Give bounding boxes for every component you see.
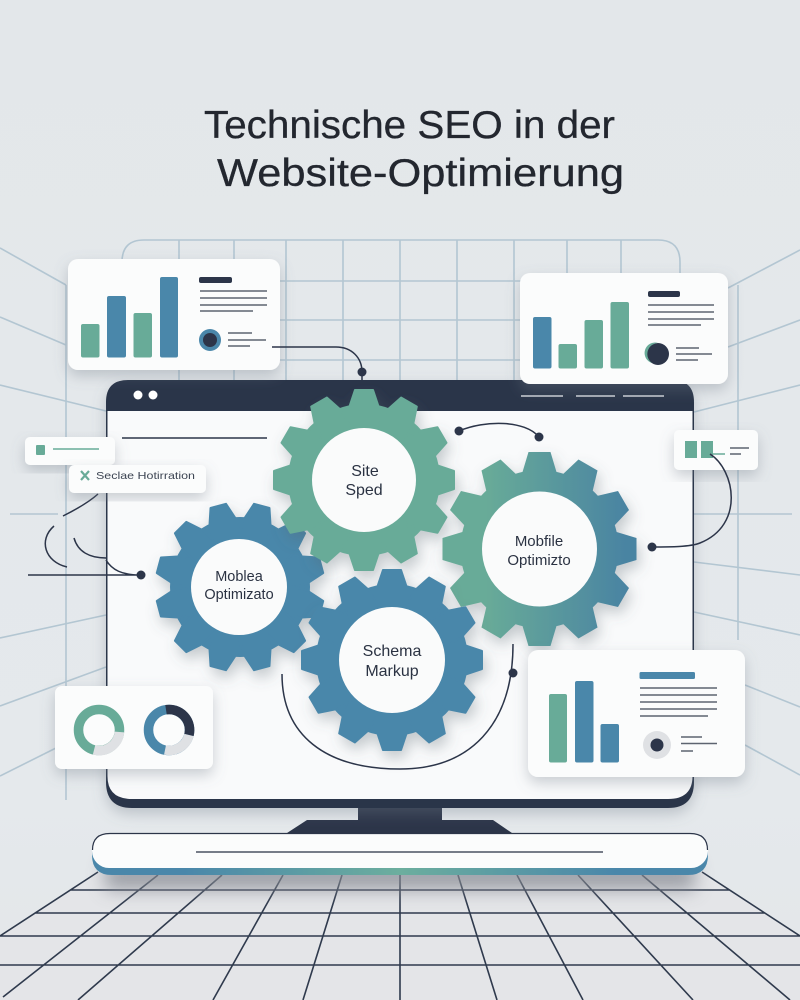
mini donut bbox=[645, 343, 669, 365]
icon: cross bbox=[81, 471, 89, 480]
gear label: Markup bbox=[365, 663, 419, 680]
card: top right chart bbox=[520, 273, 728, 384]
card: donut charts bbox=[55, 686, 213, 769]
text block bbox=[648, 291, 714, 325]
card: top left chart bbox=[68, 259, 280, 370]
background wall grid bbox=[0, 240, 800, 800]
bar chart bbox=[549, 681, 619, 762]
mini donut bbox=[643, 731, 671, 759]
legend lines bbox=[676, 348, 712, 360]
text block bbox=[640, 672, 717, 716]
bar chart bbox=[533, 302, 629, 368]
gear label: Sped bbox=[345, 482, 383, 499]
mini donut bbox=[199, 329, 221, 351]
window dots bbox=[134, 390, 158, 400]
title: Website-Optimierung bbox=[217, 152, 624, 195]
legend lines bbox=[681, 737, 717, 751]
donut: blue and dark bbox=[148, 709, 190, 750]
gear label: Site bbox=[351, 463, 379, 480]
gear label: Schema bbox=[363, 643, 421, 660]
legend lines bbox=[228, 333, 266, 346]
gear: mobile optimizato left bbox=[155, 502, 325, 672]
gear label: Mobleа bbox=[215, 569, 264, 585]
base shadow bbox=[105, 862, 695, 890]
floor grid bbox=[0, 872, 800, 1000]
gear label: Optimizto bbox=[507, 552, 571, 569]
connector to right gear bbox=[648, 454, 731, 552]
donut: green bbox=[78, 710, 120, 751]
window title line bbox=[122, 437, 267, 439]
connector: top left card to monitor bbox=[272, 347, 366, 380]
window menu lines bbox=[521, 395, 664, 397]
gear label: Optimizato bbox=[204, 587, 274, 603]
gear: site speed bbox=[274, 390, 454, 570]
connector lines bbox=[28, 423, 544, 769]
title: Technische SEO in der bbox=[204, 104, 615, 147]
status text: Seclae Hotirration bbox=[96, 470, 195, 482]
card: small left status bbox=[25, 437, 115, 465]
gear label: Mobfile bbox=[515, 533, 563, 550]
monitor stand bbox=[287, 806, 512, 833]
monitor base bbox=[92, 833, 708, 875]
bar chart bbox=[81, 277, 178, 358]
card: small right status bbox=[648, 430, 758, 552]
card: status label bbox=[69, 465, 206, 493]
gear: mobile optimizto right bbox=[440, 450, 640, 650]
card: bottom right chart bbox=[528, 650, 745, 777]
gear: schema markup bbox=[302, 570, 482, 750]
monitor screen bbox=[108, 411, 692, 799]
monitor bbox=[106, 380, 694, 833]
monitor frame bbox=[106, 380, 694, 808]
text block bbox=[199, 277, 267, 311]
